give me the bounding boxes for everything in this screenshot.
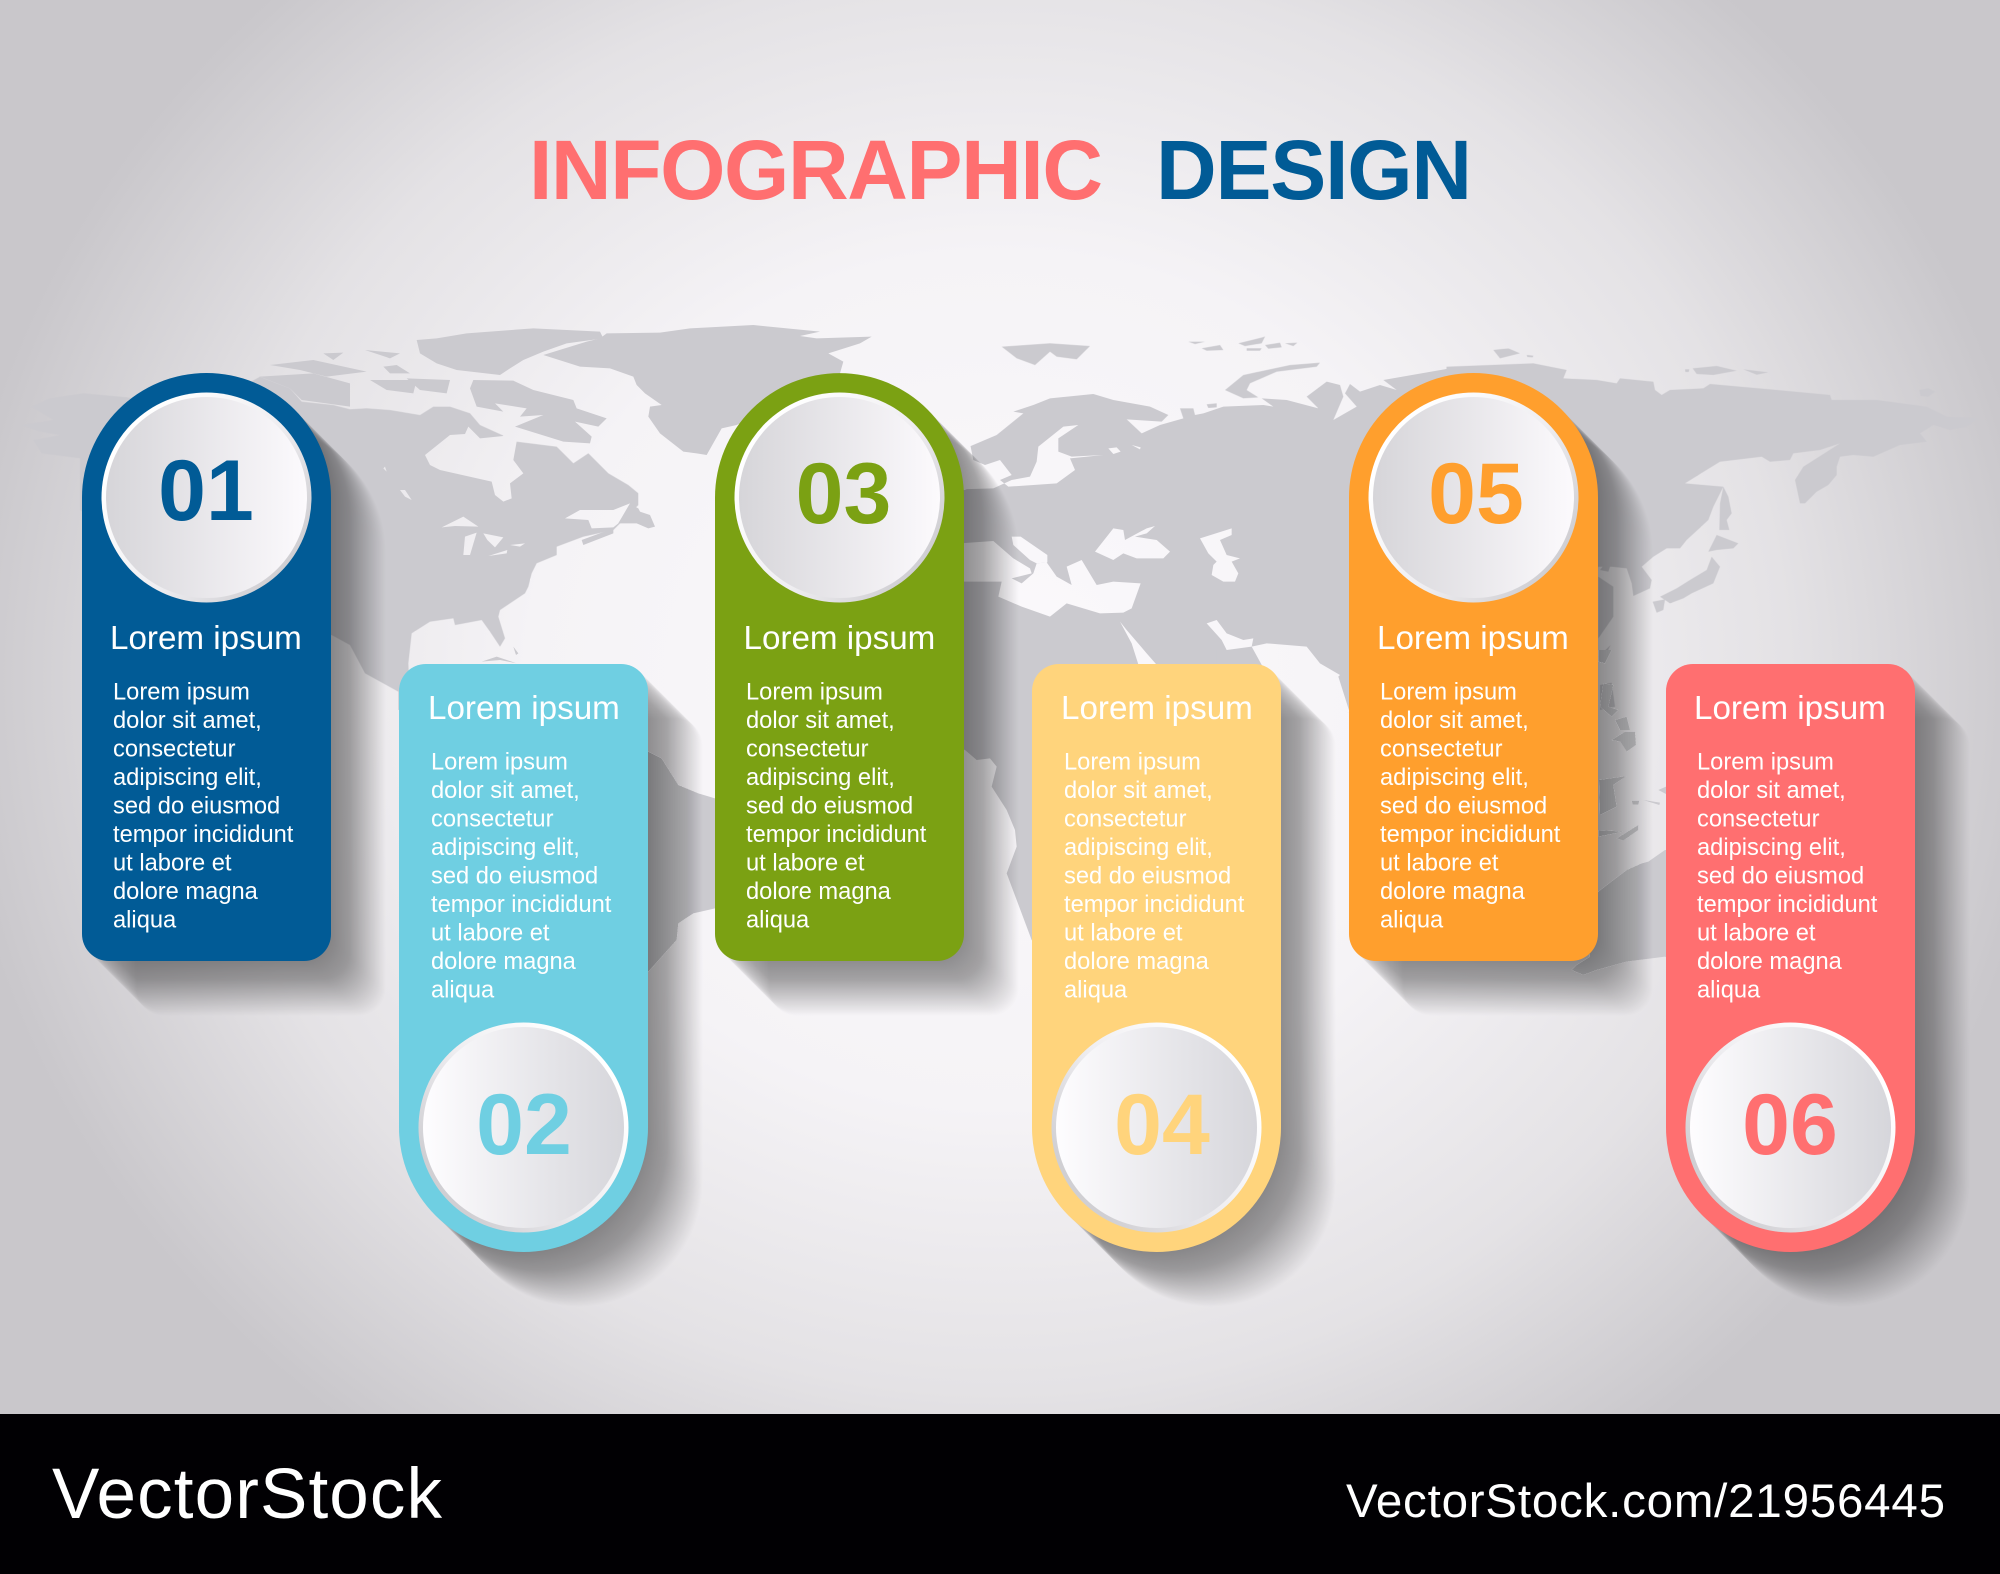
body text 03: ut labore et — [746, 850, 865, 876]
body text 03: aliqua — [746, 908, 810, 934]
heading 05: Lorem ipsum — [1377, 620, 1569, 657]
body text 01: tempor incididunt — [113, 822, 294, 848]
heading 01: Lorem ipsum — [110, 620, 302, 657]
number disc 06 — [1686, 1022, 1896, 1232]
body text 02: tempor incididunt — [431, 892, 612, 918]
body text 04: consectetur — [1064, 806, 1187, 832]
body text 03: sed do eiusmod — [746, 794, 913, 820]
body text 05: adipiscing elit, — [1380, 765, 1529, 791]
card shape 05 — [1349, 373, 1598, 961]
body text 04: dolore magna — [1064, 949, 1210, 975]
body text 03: tempor incididunt — [746, 822, 927, 848]
panel: step 06 — [1666, 664, 1915, 1252]
body text 04: ut labore et — [1064, 920, 1183, 946]
body text 02: aliqua — [431, 978, 495, 1004]
body text 05: Lorem ipsum — [1380, 680, 1517, 706]
number 01: 01 — [158, 443, 254, 539]
body text 06: ut labore et — [1697, 920, 1816, 946]
body text 04: tempor incididunt — [1064, 892, 1245, 918]
body text 05: sed do eiusmod — [1380, 794, 1547, 820]
body text 02: dolor sit amet, — [431, 778, 580, 804]
body text 03: dolor sit amet, — [746, 708, 895, 734]
body text 06: tempor incididunt — [1697, 892, 1878, 918]
body text 01: dolor sit amet, — [113, 708, 262, 734]
body text 02: ut labore et — [431, 920, 550, 946]
body text 02: sed do eiusmod — [431, 864, 598, 890]
body text 04: Lorem ipsum — [1064, 750, 1201, 776]
panel: step 01 — [82, 373, 331, 961]
body text 02: dolore magna — [431, 949, 577, 975]
body text 05: ut labore et — [1380, 850, 1499, 876]
number 06: 06 — [1742, 1077, 1838, 1173]
world map — [80, 325, 1915, 975]
body text 04: adipiscing elit, — [1064, 835, 1213, 861]
heading 04: Lorem ipsum — [1061, 690, 1253, 727]
body text 02: adipiscing elit, — [431, 835, 580, 861]
number 05: 05 — [1428, 446, 1524, 542]
body text 05: aliqua — [1380, 908, 1444, 934]
body text 02: consectetur — [431, 806, 554, 832]
number disc 05 — [1368, 392, 1578, 602]
body text 06: sed do eiusmod — [1697, 864, 1864, 890]
card shape 04 — [1032, 664, 1281, 1252]
title word: INFOGRAPHIC: INFOGRAPHIC — [529, 123, 1103, 217]
title word: DESIGN: DESIGN — [1156, 123, 1472, 217]
panel: step 05 — [1349, 373, 1598, 961]
footer url text: VectorStock.com/21956445 — [1346, 1475, 1945, 1528]
title — [529, 123, 1472, 217]
number disc 03 — [734, 392, 944, 602]
number 02: 02 — [476, 1077, 572, 1173]
footer bar — [0, 1414, 2000, 1574]
body text 01: ut labore et — [113, 850, 232, 876]
card shape 02 — [399, 664, 648, 1252]
body text 04: sed do eiusmod — [1064, 864, 1231, 890]
number disc 02 — [418, 1022, 628, 1232]
body text 05: dolor sit amet, — [1380, 708, 1529, 734]
long shadows — [83, 374, 1969, 1306]
footer logo text: VectorStock — [52, 1455, 442, 1534]
number 04: 04 — [1114, 1077, 1210, 1173]
body text 01: dolore magna — [113, 879, 259, 905]
body text 01: Lorem ipsum — [113, 680, 250, 706]
body text 05: dolore magna — [1380, 879, 1526, 905]
panel: step 04 — [1032, 664, 1281, 1252]
body text 06: Lorem ipsum — [1697, 750, 1834, 776]
card shape 01 — [82, 373, 331, 961]
body text 01: adipiscing elit, — [113, 765, 262, 791]
body text 05: consectetur — [1380, 736, 1503, 762]
body text 06: consectetur — [1697, 806, 1820, 832]
body text 03: consectetur — [746, 736, 869, 762]
number 03: 03 — [796, 446, 891, 542]
body text 03: dolore magna — [746, 879, 892, 905]
card shape 03 — [715, 373, 964, 961]
heading 02: Lorem ipsum — [428, 690, 620, 727]
body text 04: aliqua — [1064, 978, 1128, 1004]
heading 03: Lorem ipsum — [744, 620, 935, 657]
panel: step 02 — [399, 664, 648, 1252]
body text 01: aliqua — [113, 908, 177, 934]
body text 06: aliqua — [1697, 978, 1761, 1004]
body text 02: Lorem ipsum — [431, 750, 568, 776]
card shape 06 — [1666, 664, 1915, 1252]
panel: step 03 — [715, 373, 964, 961]
number disc 04 — [1052, 1022, 1262, 1232]
body text 06: dolor sit amet, — [1697, 778, 1846, 804]
body text 01: consectetur — [113, 736, 236, 762]
number disc 01 — [102, 392, 312, 602]
body text 03: adipiscing elit, — [746, 765, 895, 791]
body text 06: dolore magna — [1697, 949, 1843, 975]
heading 06: Lorem ipsum — [1694, 690, 1886, 727]
body text 05: tempor incididunt — [1380, 822, 1561, 848]
body text 03: Lorem ipsum — [746, 680, 883, 706]
body text 01: sed do eiusmod — [113, 794, 280, 820]
body text 06: adipiscing elit, — [1697, 835, 1846, 861]
body text 04: dolor sit amet, — [1064, 778, 1213, 804]
